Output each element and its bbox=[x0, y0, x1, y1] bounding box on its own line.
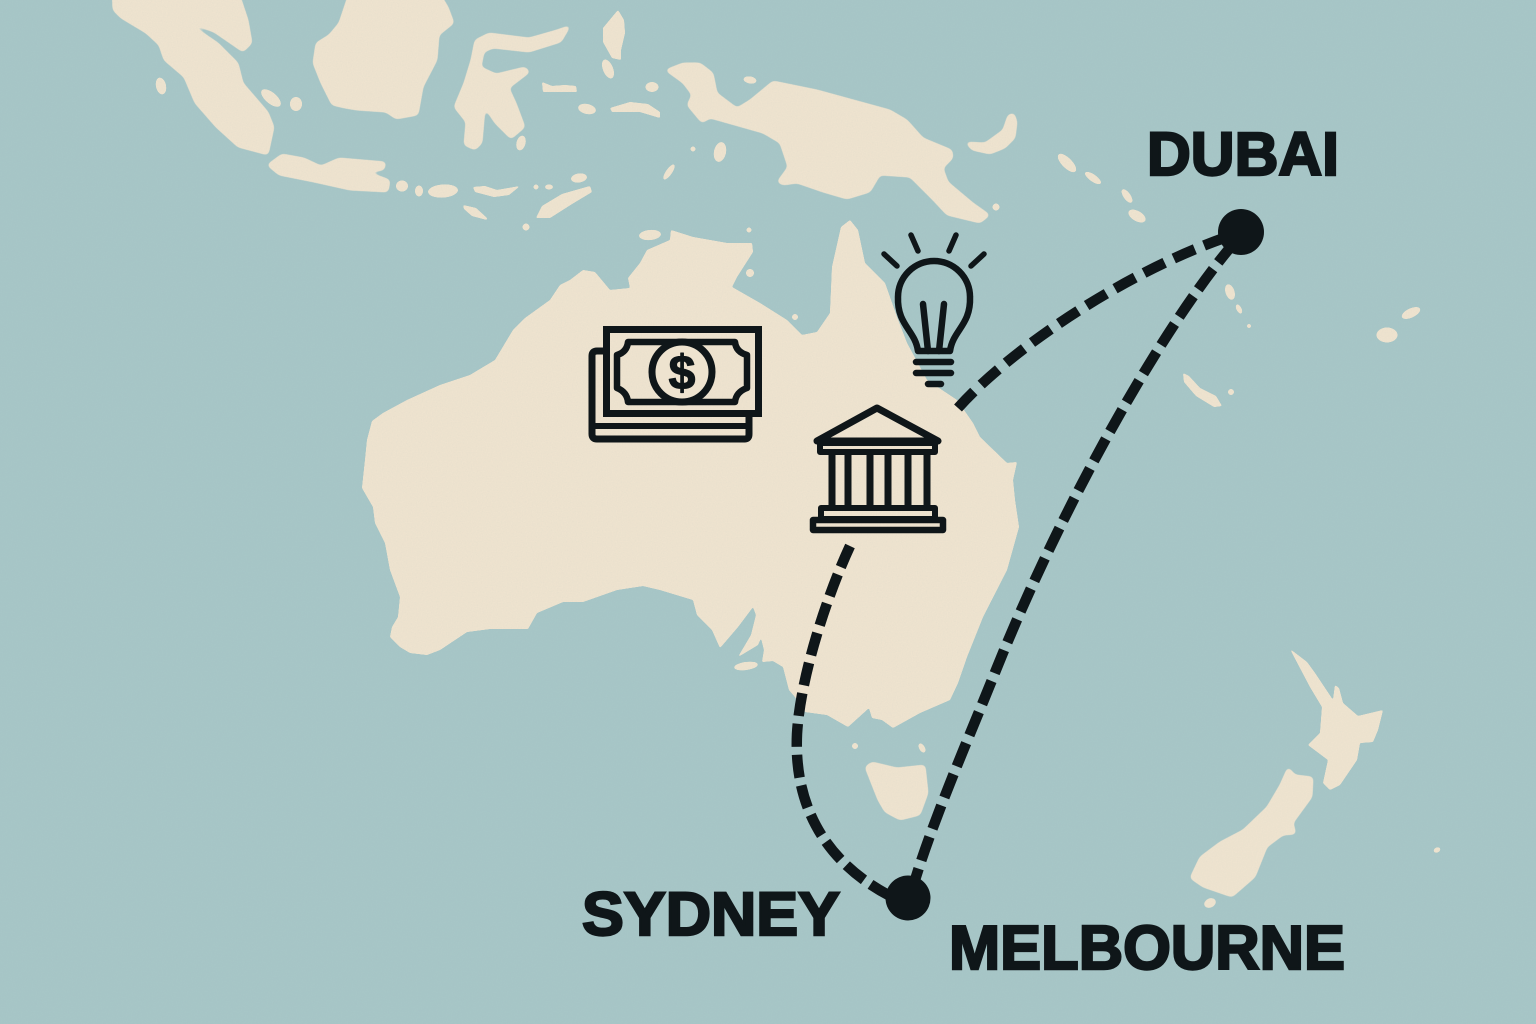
land: New Guinea bbox=[665, 63, 990, 223]
land: islands around Australia bbox=[639, 228, 927, 754]
land: Stewart Island bbox=[1203, 896, 1217, 910]
city marker: Dubai bbox=[1218, 209, 1264, 255]
land: New Zealand South Island bbox=[1190, 767, 1313, 897]
landmasses bbox=[112, 0, 1441, 910]
land: small islands off Sumatra bbox=[154, 77, 302, 111]
dashed route: Dubai to east coast of Australia bbox=[958, 238, 1224, 408]
land: Tasmania bbox=[865, 762, 928, 820]
land: Solomon and Pacific islands bbox=[992, 151, 1441, 854]
icon: light bulb bbox=[884, 235, 984, 384]
label: Melbourne: MELBOURNE bbox=[949, 914, 1345, 983]
dashed route: bank icon to Melbourne bbox=[797, 546, 892, 897]
land: New Britain bbox=[965, 113, 1017, 154]
land: Lesser Sunda islands bbox=[396, 172, 592, 230]
label: Dubai: DUBAI bbox=[1147, 120, 1339, 188]
city marker: Melbourne and Sydney bbox=[886, 876, 930, 920]
dashed route: Dubai to Melbourne bbox=[915, 243, 1234, 880]
land: Sumatra bbox=[112, 0, 274, 155]
land: Australia bbox=[362, 220, 1019, 728]
land: Sulawesi bbox=[454, 25, 571, 150]
land: Java bbox=[267, 154, 390, 192]
dollar sign: $ bbox=[669, 347, 696, 400]
land: Borneo bbox=[313, 0, 454, 119]
icon: banknotes with dollar sign bbox=[592, 330, 758, 439]
land: Maluku islands bbox=[515, 10, 757, 181]
label: Sydney: SYDNEY bbox=[582, 880, 840, 948]
icon: bank building with columns bbox=[813, 408, 943, 530]
land: New Zealand North Island bbox=[1290, 649, 1383, 790]
